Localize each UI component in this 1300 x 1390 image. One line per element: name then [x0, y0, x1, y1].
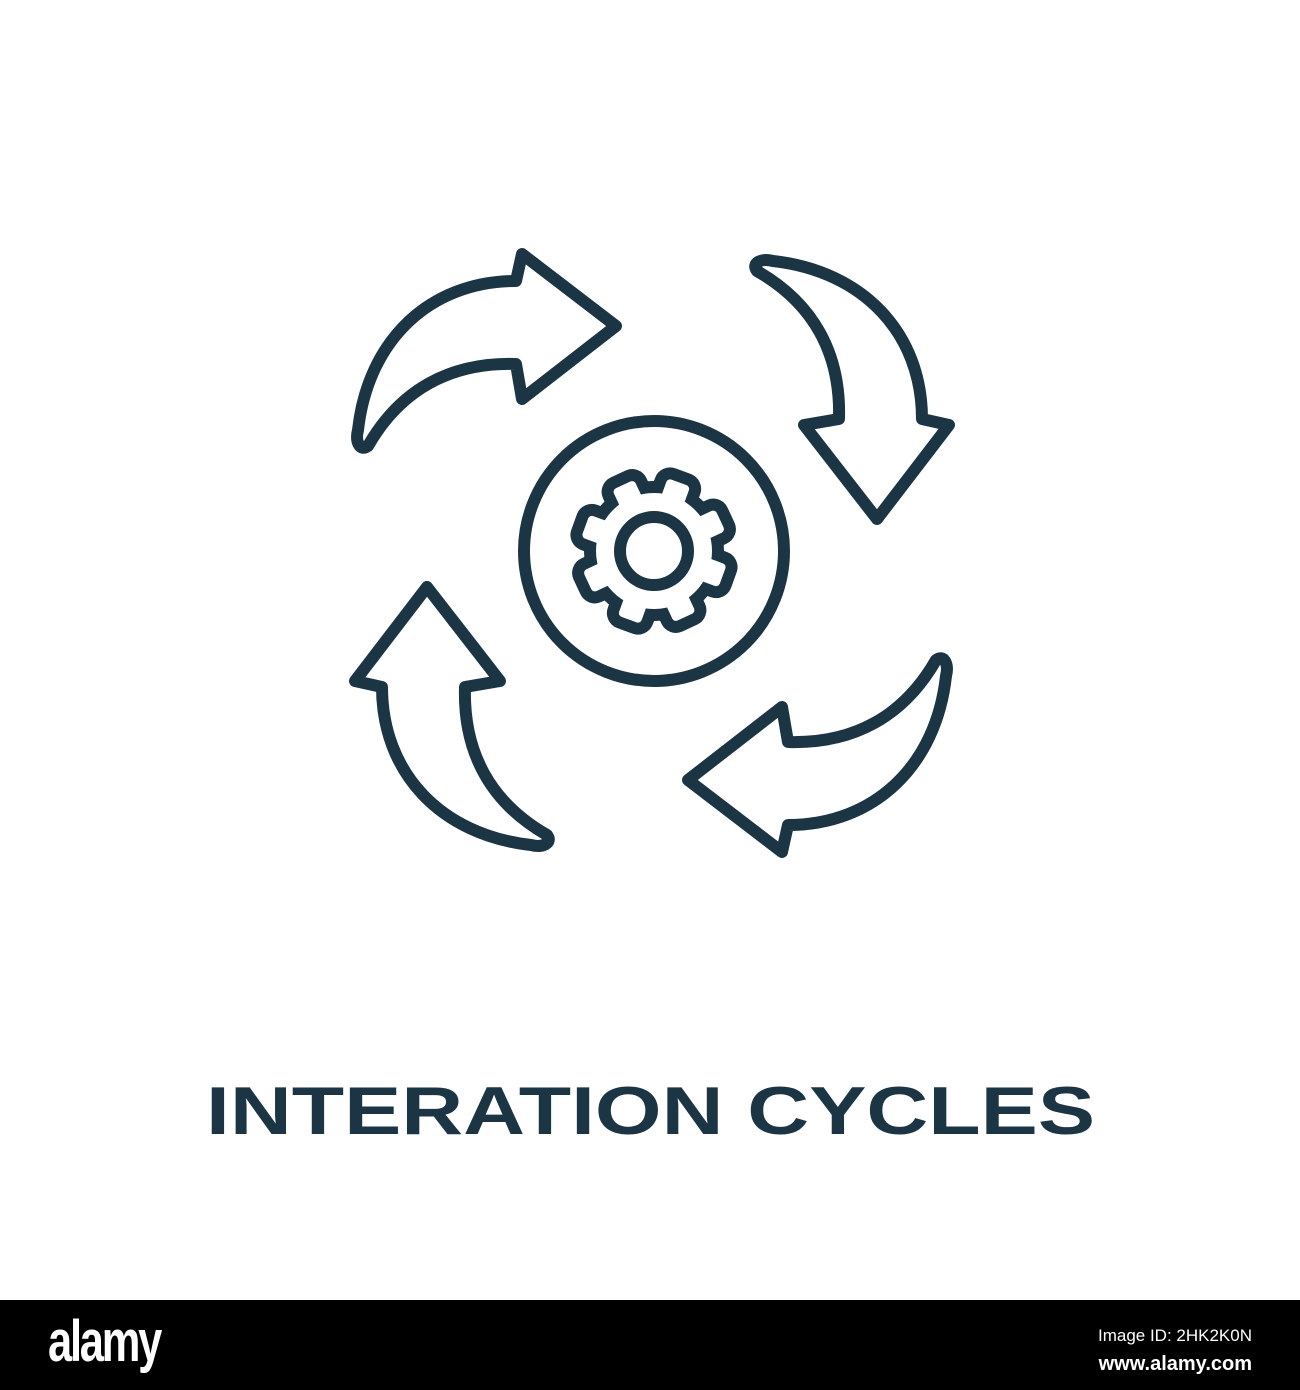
- logo: alamy: alamy: [48, 1309, 160, 1374]
- icon: gear in circle: [524, 421, 784, 681]
- arrow: top-right: [755, 260, 949, 519]
- title: INTERATION CYCLES: [206, 1073, 1095, 1149]
- image id text: [1098, 1326, 1252, 1375]
- arrow: bottom-left: [355, 587, 549, 846]
- image id text: www.alamy.com: [1099, 1353, 1252, 1375]
- image id text: Image ID: 2HK2K0N: [1098, 1326, 1252, 1345]
- arrow: top-left: [357, 254, 616, 448]
- arrow: bottom-right: [688, 658, 947, 852]
- footer bar: [0, 1300, 1300, 1390]
